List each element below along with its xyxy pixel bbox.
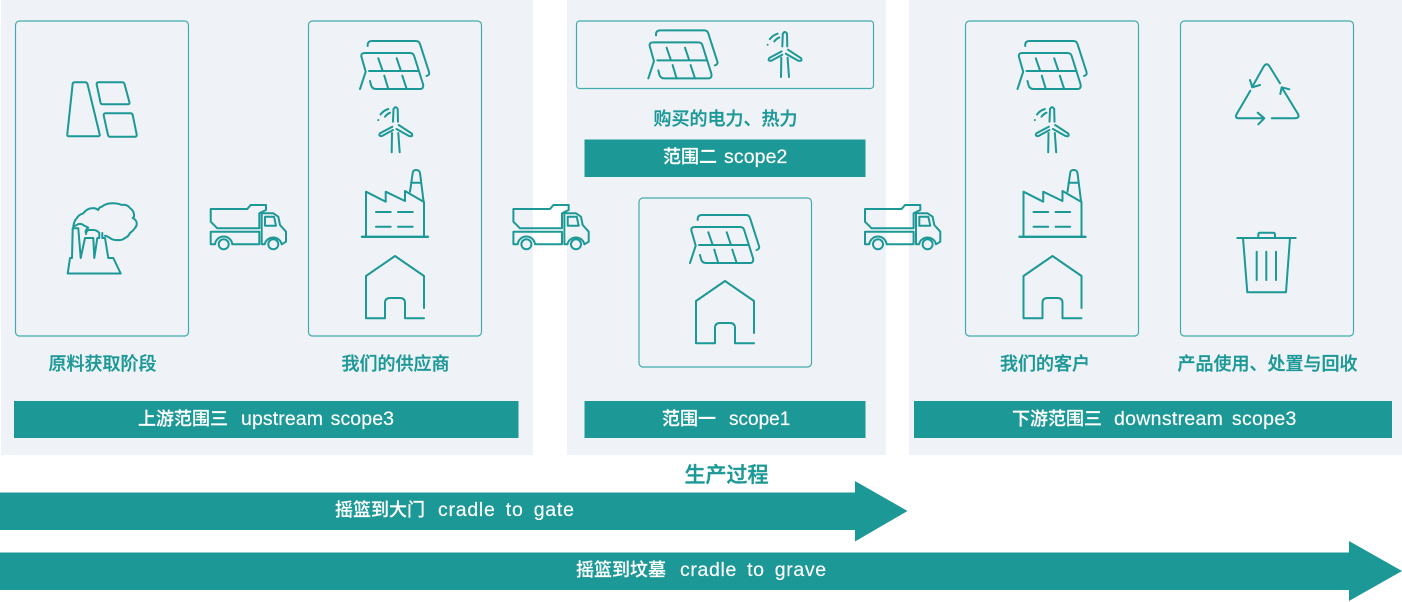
box: use and disposal xyxy=(1180,21,1354,336)
arrow label: cradle to grave: 摇篮到坟墓 xyxy=(576,560,666,580)
bar label: downstream scope 3: downstream scope3 xyxy=(1114,408,1297,430)
text: purchased electricity and heat: 购买的电力、热力 xyxy=(654,109,798,129)
bar label: upstream scope 3: 上游范围三 xyxy=(138,409,228,429)
icon: wind turbine xyxy=(1035,107,1069,152)
icon: truck upstream xyxy=(211,205,286,249)
arrow label: cradle to gate: cradle to gate xyxy=(438,499,575,521)
arrow: cradle to grave xyxy=(0,541,1402,601)
bar label: downstream scope 3: 下游范围三 xyxy=(1012,409,1102,429)
box: our suppliers xyxy=(308,21,482,336)
text: our customers: 我们的客户 xyxy=(1000,354,1090,374)
icon: building xyxy=(696,281,754,343)
heading: production process: 生产过程 xyxy=(684,464,768,487)
box: own operations xyxy=(639,198,812,367)
text: raw material stage: 原料获取阶段 xyxy=(48,354,156,374)
arrow label: cradle to grave: cradle to grave xyxy=(680,559,827,581)
text: our suppliers: 我们的供应商 xyxy=(342,353,450,374)
arrow label: cradle to gate: 摇篮到大门 xyxy=(335,500,425,520)
bar label: scope 1: 范围一 xyxy=(662,409,716,429)
icon: building xyxy=(366,256,424,318)
panel: scope 1 and 2 xyxy=(567,0,886,455)
bar: upstream scope 3 xyxy=(14,401,518,438)
icon: solar panel xyxy=(648,30,718,78)
bar: scope 1 xyxy=(584,401,866,438)
icon: truck to production xyxy=(513,205,589,249)
panel: upstream scope 3 xyxy=(1,0,533,455)
box: our customers xyxy=(966,21,1138,336)
icon: wind turbine xyxy=(378,107,412,152)
bar label: upstream scope 3: upstream scope3 xyxy=(241,408,394,430)
bar: scope 2 xyxy=(584,140,866,177)
box: raw materials xyxy=(16,21,188,336)
icon: factory xyxy=(1020,170,1086,237)
icon: truck downstream xyxy=(865,205,940,249)
arrow: cradle to gate xyxy=(0,481,908,542)
box: purchased energy xyxy=(576,21,874,88)
icon: raw material blocks xyxy=(67,82,137,137)
icon: building xyxy=(1024,256,1082,318)
icon: power plant with smoke xyxy=(68,203,137,274)
icon: solar panel xyxy=(690,215,759,263)
bar label: scope 1: scope1 xyxy=(729,409,790,430)
bar label: scope 2: scope2 xyxy=(724,146,787,168)
icon: wind turbine xyxy=(768,32,802,77)
text: use, disposal and recovery: 产品使用、处置与回收 xyxy=(1178,354,1358,374)
panel: downstream scope 3 xyxy=(909,0,1402,455)
bar label: scope 2: 范围二 xyxy=(663,147,717,167)
icon: factory xyxy=(362,170,428,237)
icon: solar panel xyxy=(360,41,429,89)
icon: solar panel xyxy=(1018,41,1087,89)
icon: recycling triangle xyxy=(1236,64,1299,124)
bar: downstream scope 3 xyxy=(914,401,1392,438)
icon: trash bin xyxy=(1237,233,1296,292)
